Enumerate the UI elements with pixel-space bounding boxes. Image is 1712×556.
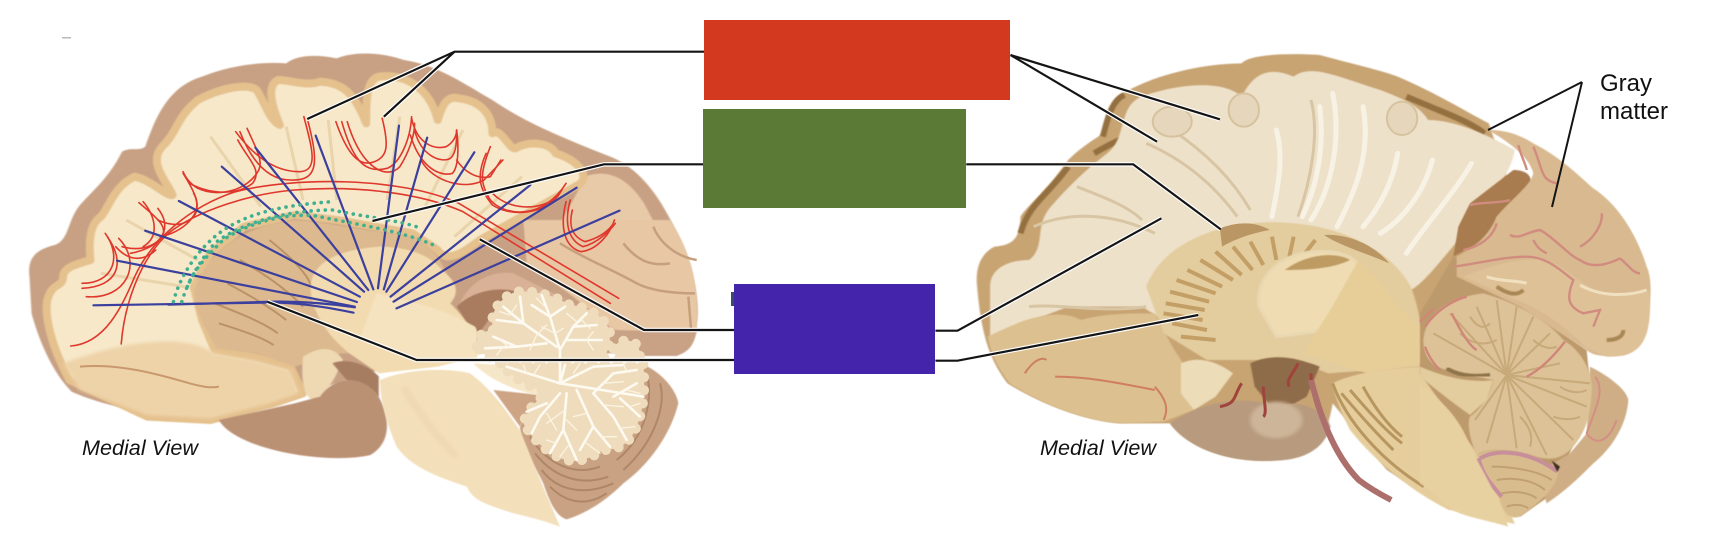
- occipital upper gyri: [547, 174, 684, 330]
- lower occipital fold: [607, 330, 697, 356]
- cerebellum fissure: [1447, 368, 1490, 376]
- white matter core with gray band: [47, 76, 583, 420]
- vessel stalk: [1311, 380, 1391, 500]
- cerebellum right lobe: [1537, 367, 1628, 503]
- brainstem: [380, 370, 560, 527]
- white matter: [990, 71, 1515, 337]
- fibers and leaders over left brain: [71, 52, 741, 360]
- dark cortex edge: [1020, 95, 1484, 233]
- lower lobe: [1477, 450, 1558, 518]
- hypothalamus piece: [302, 349, 343, 400]
- thalamus cap: [1285, 255, 1350, 270]
- label: gray matter second line: matter: [1600, 98, 1668, 125]
- peduncle: [360, 293, 477, 362]
- arbor vitae lobes: [476, 291, 644, 461]
- midbrain block: [1302, 260, 1424, 373]
- vessels dark: [1220, 363, 1320, 417]
- leader lines over dissected brain: [935, 55, 1221, 361]
- white matter streaks: [101, 117, 522, 287]
- fan ridges: [1164, 223, 1389, 340]
- cerebrum outer cortex: [29, 54, 698, 420]
- medial tan band: [460, 273, 623, 337]
- folia striations: [530, 373, 662, 502]
- cortex vessels: [1453, 145, 1640, 327]
- illustration: cerebrum base: [29, 54, 698, 458]
- leader lines: right brain halo: [935, 55, 1221, 361]
- leader lines: left brain black: [267, 52, 741, 360]
- gyrus bulges: [1153, 93, 1417, 137]
- hollow striations: [215, 240, 311, 345]
- label: gray matter: Gray: [1600, 70, 1652, 97]
- brainstem fibers: [1333, 383, 1424, 487]
- photograph: dissected brain front part: [977, 54, 1532, 524]
- temporal lobe: [219, 380, 387, 458]
- association fibers: [82, 117, 615, 297]
- lower occipital fold: [1463, 259, 1650, 357]
- cerebellum notch: [1552, 461, 1560, 472]
- occipital cortex: [1457, 130, 1651, 356]
- frontal base shading: [63, 341, 299, 418]
- label: medial view right: Medial View: [1040, 435, 1157, 460]
- brain silhouette: [977, 54, 1532, 510]
- brainstem shading: [403, 387, 457, 457]
- midbrain shadow: [332, 361, 379, 397]
- basal ganglia fan: [1146, 222, 1422, 373]
- light band under arbor: [473, 363, 560, 395]
- ventricular hollow: [194, 220, 450, 367]
- wedge between brainstem and arbor: [493, 390, 540, 427]
- brainstem: [1333, 367, 1515, 524]
- optic chiasm area: [1181, 360, 1233, 410]
- temporal lobe: [1170, 401, 1331, 461]
- gray matter leader lines: [1488, 82, 1582, 207]
- leader lines: right brain black: [935, 55, 1221, 361]
- frontal base: [988, 313, 1198, 423]
- arbor vitae fine twigs: [497, 298, 640, 457]
- temporal highlight: [1250, 402, 1302, 438]
- lower lobe vessels: [1478, 453, 1557, 497]
- cavity shadow: [1250, 357, 1320, 413]
- fiber shading: [1029, 100, 1315, 309]
- purple label box: [731, 284, 935, 374]
- right lobe vessels: [1587, 377, 1617, 441]
- occipital gyrus lines: [560, 227, 697, 337]
- backing fill under posterior lobes: [1420, 257, 1592, 517]
- cerebellum outer folia: [520, 363, 678, 519]
- arbor vitae main branches: [485, 295, 643, 460]
- white streaks: [1272, 93, 1471, 253]
- photograph: dissected brain posterior part: [1420, 130, 1651, 527]
- label: medial view left: Medial View: [82, 435, 199, 460]
- red label box: [704, 20, 1010, 100]
- projection fibers: [93, 126, 620, 313]
- dark gap beside white matter: [1453, 170, 1531, 257]
- occipital lobe: [523, 220, 697, 333]
- gap behind cerebellum: [457, 290, 517, 337]
- thalamus: [311, 247, 478, 373]
- lower lobe arcs: [1492, 467, 1552, 508]
- cerebellum vessels: [1420, 297, 1565, 377]
- brainstem tail: [1420, 383, 1508, 527]
- illustration: occipital lobe and cerebellum: [360, 220, 697, 527]
- cerebellum cut face: [1423, 293, 1592, 459]
- thalamus region: [1259, 251, 1363, 337]
- green label box: [703, 109, 966, 208]
- frontal base sulcus: [80, 366, 219, 387]
- fold shadow: [1497, 287, 1623, 340]
- fold highlight: [1487, 277, 1647, 295]
- cerebellum folds: [1433, 300, 1590, 455]
- commissural fibers: [71, 117, 619, 346]
- frontal vessels: [1025, 359, 1166, 420]
- peduncle band: [1420, 367, 1493, 415]
- leader lines: left brain halo: [267, 52, 741, 360]
- commissural dots: [173, 202, 434, 302]
